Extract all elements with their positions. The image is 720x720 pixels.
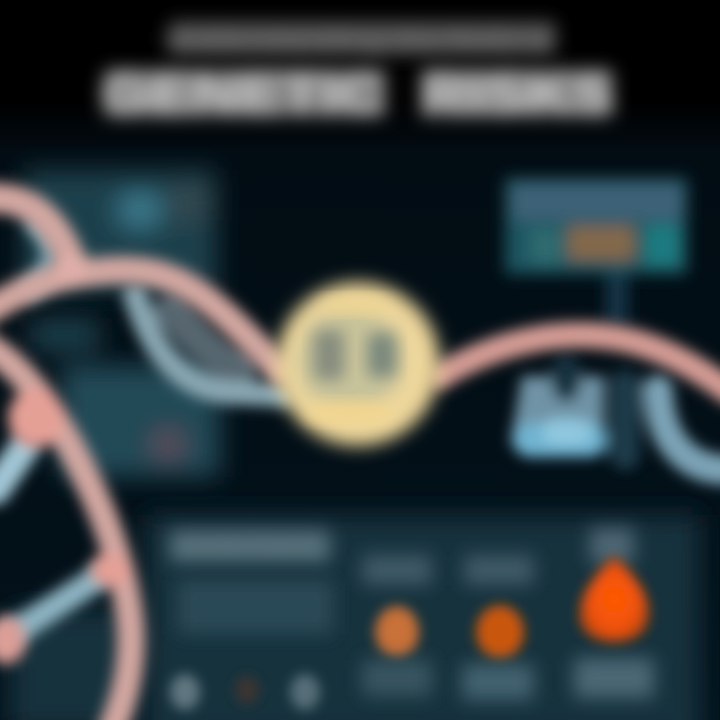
highlight band bottom bbox=[306, 402, 394, 422]
right dark band bbox=[610, 385, 640, 455]
title: main line bbox=[100, 62, 615, 127]
highlight band top bbox=[319, 297, 391, 313]
label: high risk top bbox=[590, 528, 634, 564]
medium risk column bbox=[462, 555, 534, 700]
label: low risk top bbox=[362, 555, 432, 585]
icon: teal dot bbox=[118, 192, 162, 228]
big lower arc bbox=[0, 345, 131, 720]
panel header band bbox=[512, 184, 682, 220]
right curve bbox=[658, 390, 720, 470]
lower left teal wash bbox=[10, 610, 130, 720]
left junction glow bbox=[52, 254, 88, 282]
central left strand bbox=[0, 270, 282, 372]
connector stem bbox=[606, 275, 628, 325]
right strand bbox=[440, 335, 720, 392]
arc upper node bbox=[8, 388, 64, 448]
panel: lower left data card bbox=[30, 318, 220, 477]
gene block right bbox=[368, 333, 396, 377]
left edge node bbox=[0, 616, 26, 664]
inner tint bbox=[298, 308, 402, 412]
illustration: blue DNA rungs bbox=[0, 226, 720, 632]
icon: low risk orange circle bbox=[375, 606, 419, 658]
title: main line: RISKS bbox=[420, 62, 615, 127]
icon: small grey dot right bbox=[290, 674, 320, 710]
left small loop bbox=[30, 226, 50, 290]
upper left loop bbox=[0, 198, 76, 272]
text block: panel description bbox=[178, 580, 333, 634]
icon: small grey dot left bbox=[170, 674, 200, 710]
label: high risk bottom bbox=[574, 658, 654, 698]
right V notch bbox=[551, 354, 581, 402]
low risk column bbox=[362, 555, 432, 696]
icon: small brown dot bbox=[235, 676, 259, 704]
illustration: pink DNA strands bbox=[0, 198, 720, 720]
right V block bbox=[515, 380, 600, 440]
icon: muted red dot bbox=[152, 429, 184, 461]
text block: panel heading: Genetic Factors bbox=[172, 536, 330, 561]
left central strand bbox=[135, 295, 285, 395]
left grey infill bbox=[172, 310, 240, 368]
title: eyebrow line: Understanding the Role of bbox=[165, 25, 556, 56]
panel: upper right card bbox=[505, 178, 687, 325]
label: medium risk bottom bbox=[462, 664, 534, 700]
panel background bbox=[145, 515, 700, 720]
gene block left bbox=[314, 330, 344, 380]
icon: medium risk orange circle bbox=[476, 605, 524, 659]
gold disc bbox=[276, 282, 440, 446]
title: main line: GENETIC bbox=[100, 62, 385, 127]
panel: bottom risk scale bbox=[145, 515, 700, 720]
arc lower node bbox=[90, 553, 130, 587]
title bbox=[100, 22, 615, 127]
label: medium risk top bbox=[464, 555, 534, 585]
panel: upper left data card bbox=[22, 170, 217, 290]
chart: central bar bbox=[568, 226, 634, 260]
lower left rungs bbox=[0, 448, 24, 490]
label: low risk bottom bbox=[362, 660, 432, 696]
illustration: central gold circle bbox=[276, 282, 440, 446]
high risk column bbox=[574, 528, 654, 698]
icon: high risk flame bbox=[580, 556, 649, 642]
